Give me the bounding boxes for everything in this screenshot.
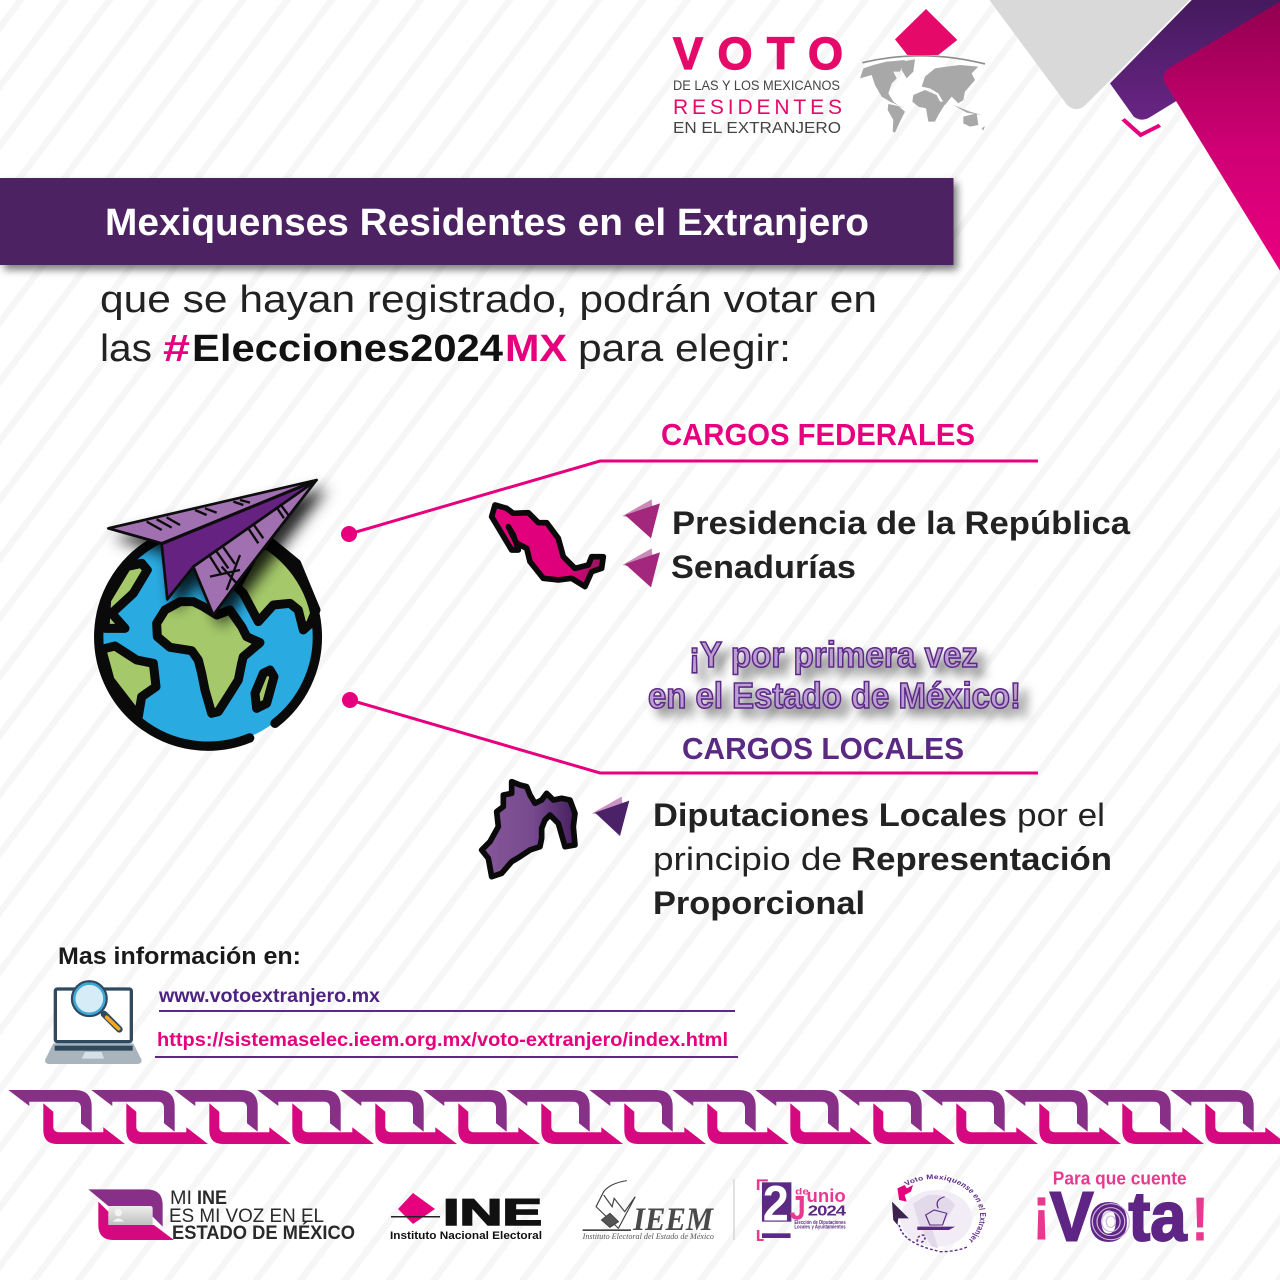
intro text: MX — [505, 328, 568, 370]
icon: map of Estado de Mexico — [482, 782, 575, 877]
local item: diputaciones: por el — [1017, 797, 1105, 833]
logo: voto mexiquense en el extranjero: Voto Mexiquense en el Extranjero — [904, 1174, 986, 1243]
illustration: globe with paper plane — [99, 480, 317, 746]
logo: para que cuente vota: Para que cuente — [1053, 1168, 1187, 1189]
logo: 2 de junio 2024: Elección de Diputaciones — [794, 1220, 846, 1226]
connector: federal — [341, 461, 1038, 542]
logo: INE: Instituto Nacional Electoral — [390, 1230, 542, 1242]
bullet arrow: senadurias — [622, 548, 660, 587]
logo: INE: INE — [443, 1192, 542, 1233]
callout: por primera vez: ¡Y por primera vez — [689, 634, 978, 675]
icon: map of Mexico — [492, 505, 603, 587]
local item: diputaciones — [653, 797, 1112, 921]
logo: 2 de junio 2024: 2024 — [808, 1202, 847, 1219]
logo wordmark: EN EL EXTRANJERO — [673, 120, 841, 137]
logo: IEEM: IEEM — [632, 1202, 715, 1238]
chain band — [8, 1090, 1280, 1144]
intro text: # — [163, 328, 190, 370]
logo: voto mexiquense en el extranjero — [892, 1174, 986, 1252]
logo: INE — [390, 1192, 542, 1242]
local item: diputaciones: Proporcional — [653, 885, 865, 921]
icon: laptop with magnifier — [45, 981, 142, 1064]
icon: ballot and world map — [860, 9, 985, 133]
logo: mi ine es mi voz: INE — [197, 1188, 227, 1209]
local item: diputaciones: Representación — [851, 841, 1112, 877]
logo: mi ine es mi voz: ES MI VOZ EN EL — [169, 1206, 324, 1227]
logo: mi ine es mi voz: MI — [170, 1188, 192, 1209]
intro text — [100, 279, 877, 370]
intro text: para elegir: — [578, 328, 791, 370]
local item: diputaciones: principio de — [653, 841, 842, 877]
logo: mi ine es mi voz — [88, 1188, 355, 1244]
paper plane — [108, 480, 317, 615]
callout: por primera vez — [648, 634, 1021, 716]
corner decoration: geometric shapes — [989, 0, 1280, 271]
logo: mi ine es mi voz: ESTADO DE MÉXICO — [172, 1222, 355, 1244]
heading: cargos locales: CARGOS LOCALES — [682, 731, 964, 766]
intro text: que se hayan registrado, podrán votar en — [100, 279, 877, 321]
federal item: senadurias: Senadurías — [671, 549, 856, 585]
logo: 2 de junio 2024 — [758, 1176, 847, 1240]
link: voto extranjero: www.votoextranjero.mx — [158, 986, 380, 1007]
link: sistemas ieem: https://sistemaselec.ieem.org.mx/voto-extranjero/index.html — [157, 1030, 728, 1051]
heading: mas informacion: Mas información en: — [58, 943, 301, 970]
connector: local — [342, 692, 1038, 773]
logo: 2 de junio 2024: J — [790, 1189, 806, 1227]
logo: IEEM: Instituto Electoral del Estado de México — [582, 1232, 714, 1241]
logo wordmark: VOTO — [673, 28, 843, 79]
logo wordmark — [673, 28, 843, 137]
logo: 2 de junio 2024: de — [795, 1187, 809, 1197]
title banner: Mexiquenses Residentes en el Extranjero — [105, 202, 869, 244]
logo: voto de las y los mexicanos residentes en el extranjero — [673, 9, 985, 137]
intro text: Elecciones2024 — [192, 328, 503, 370]
logo: 2 de junio 2024: unio — [807, 1185, 846, 1206]
callout: por primera vez: en el Estado de México! — [648, 675, 1021, 716]
title banner — [0, 178, 954, 265]
logo wordmark: DE LAS Y LOS MEXICANOS — [673, 78, 840, 93]
logo: 2 de junio 2024: Locales y Ayuntamientos — [794, 1225, 846, 1230]
bullet arrow: presidencia — [622, 499, 660, 538]
globe — [99, 528, 317, 746]
logo: para que cuente vota: Vota — [1050, 1178, 1188, 1256]
logo: IEEM — [582, 1179, 735, 1241]
logo: para que cuente vota: ¡ — [1032, 1173, 1051, 1242]
intro text: las — [100, 328, 152, 370]
local item: diputaciones: Diputaciones Locales — [653, 797, 1007, 833]
logo wordmark: RESIDENTES — [673, 96, 842, 119]
federal item: presidencia: Presidencia de la República — [672, 505, 1130, 541]
bullet arrow: diputaciones — [592, 797, 629, 836]
heading: cargos federales: CARGOS FEDERALES — [661, 417, 975, 452]
logo: para que cuente vota: ! — [1191, 1185, 1209, 1255]
logo: 2 de junio 2024: 2 — [763, 1176, 789, 1232]
